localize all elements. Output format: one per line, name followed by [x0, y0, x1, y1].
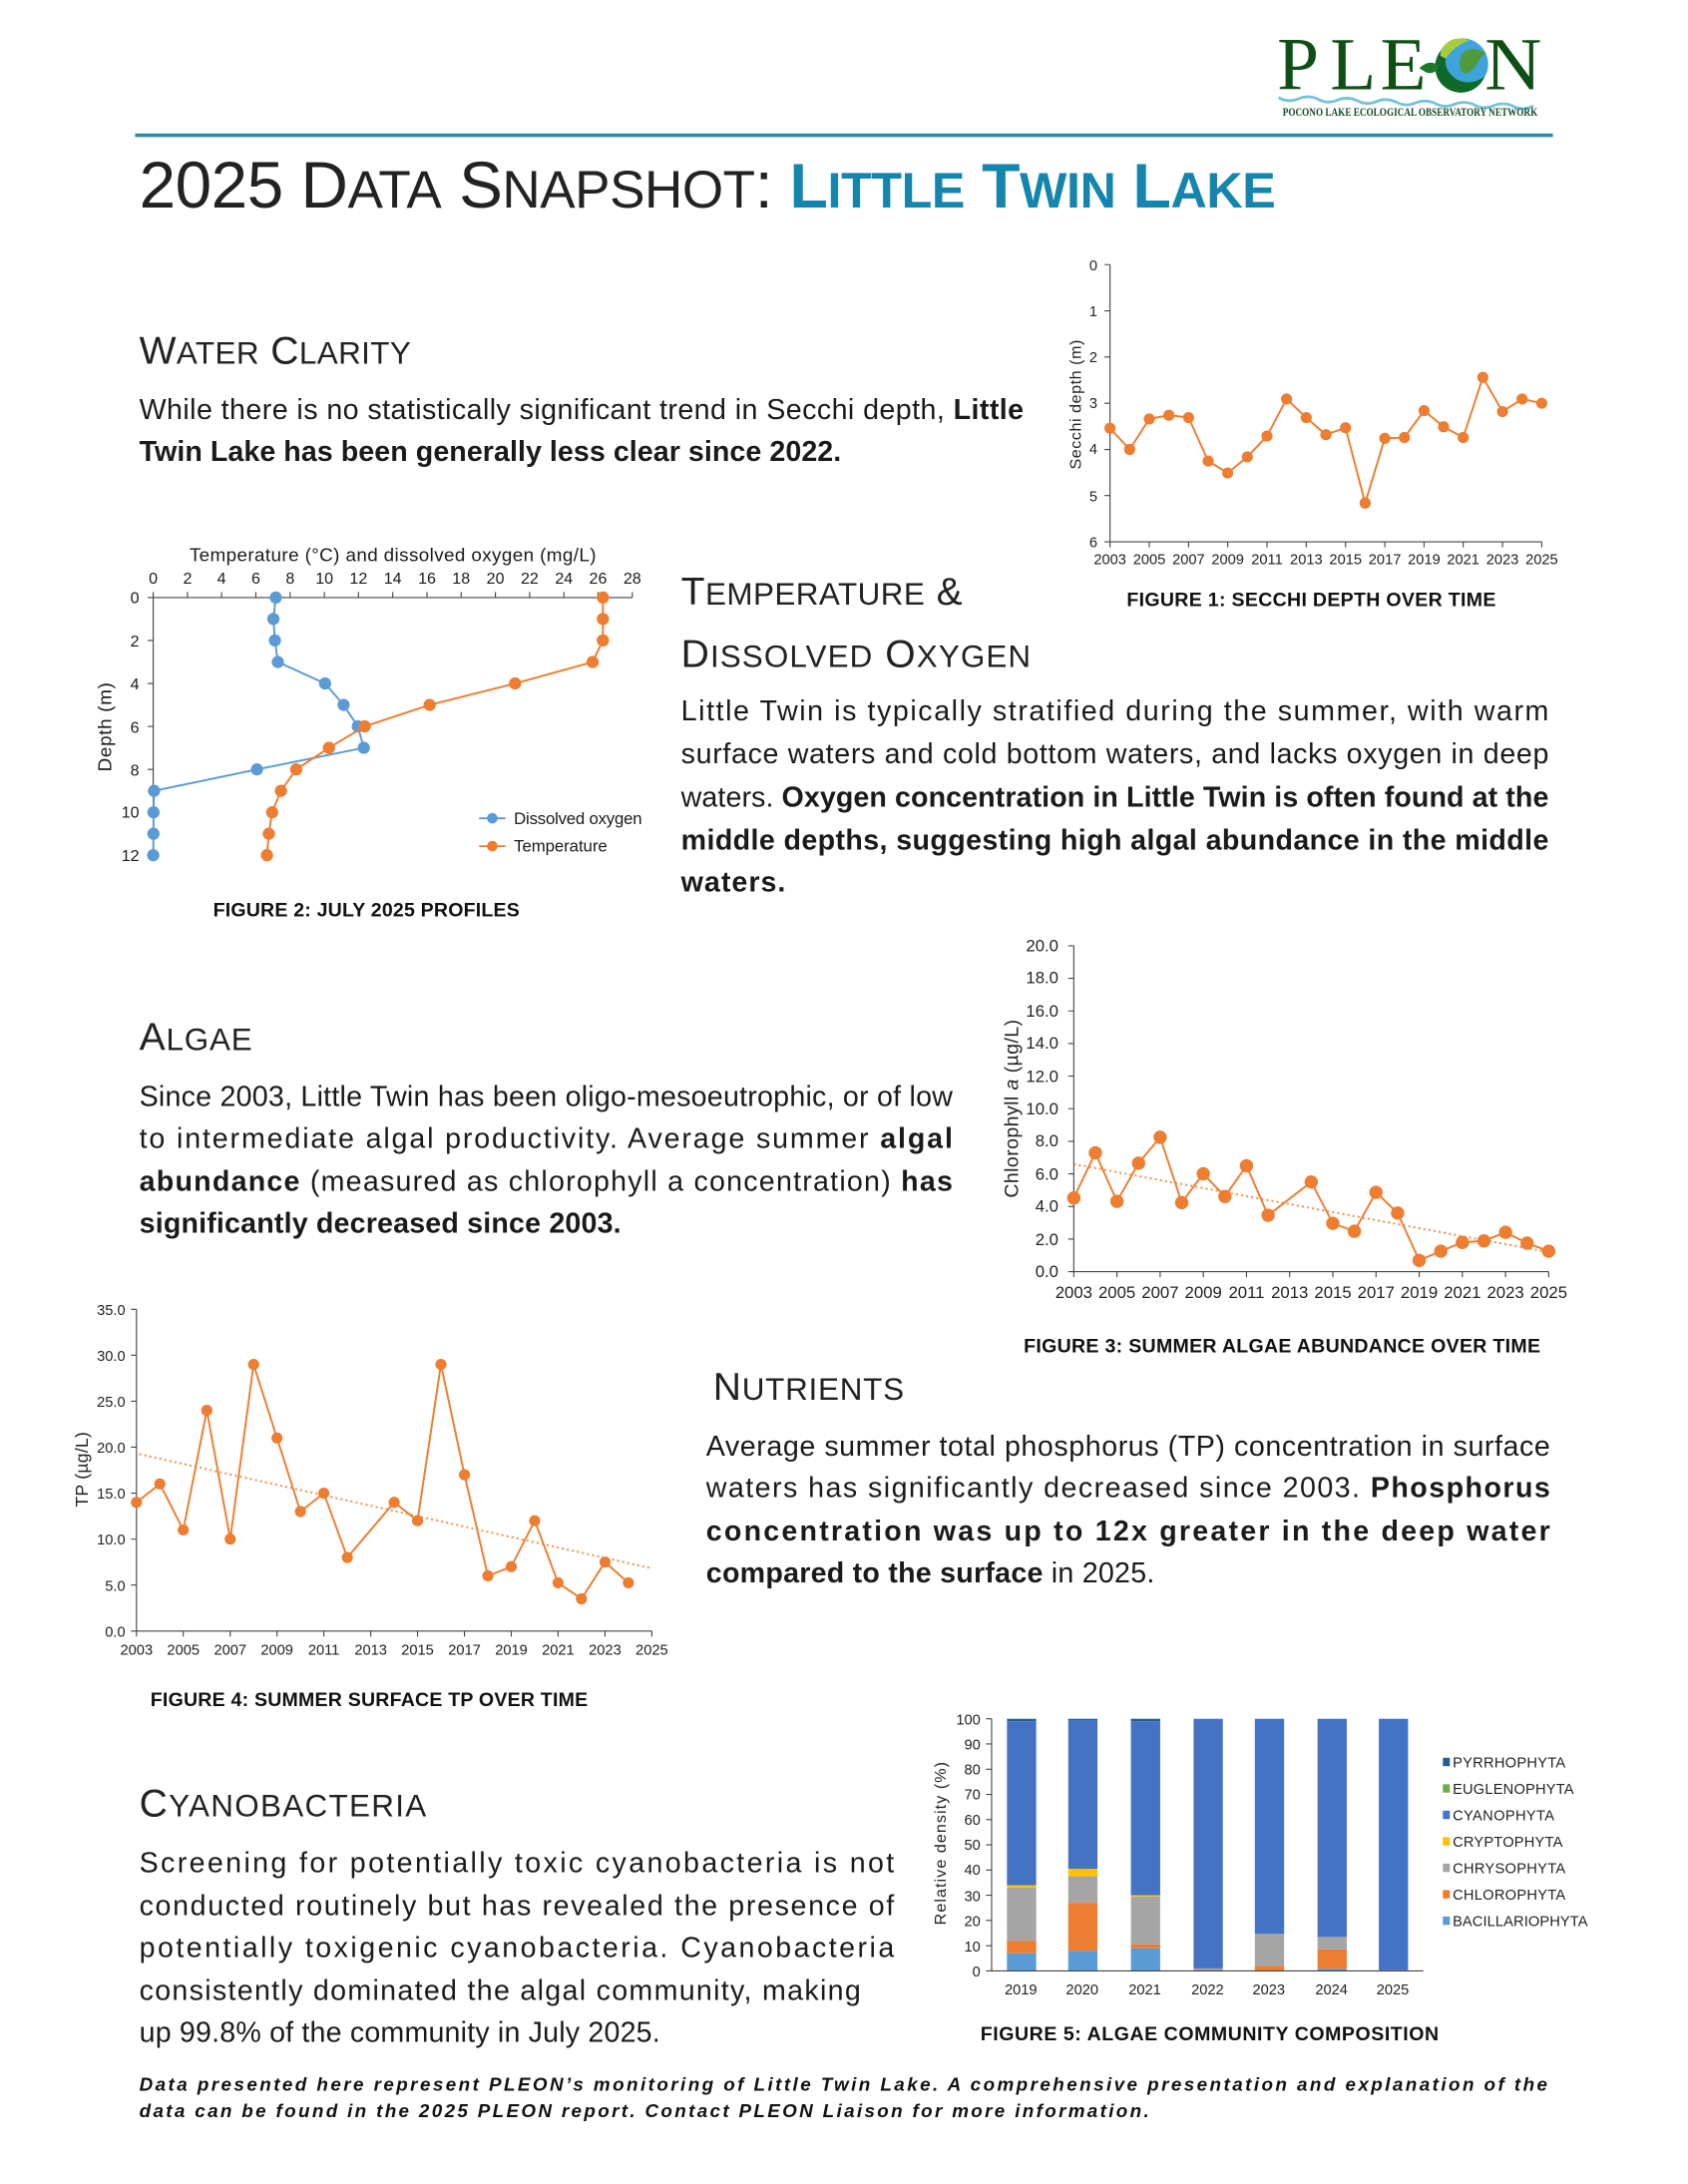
- axis labels: 0: [973, 1965, 981, 1980]
- axis labels: 10.0: [1026, 1099, 1058, 1118]
- axis labels: 4: [217, 570, 226, 588]
- axis labels: 2017: [448, 1642, 481, 1658]
- axis labels: 2011: [1228, 1283, 1264, 1302]
- heading: algae: ALGAE: [140, 1017, 252, 1060]
- section: temperature and dissolved oxygen: [680, 571, 1548, 898]
- text block: algae: abundance (measured as chlorophyll a concentration) has: [140, 1166, 953, 1198]
- text block: algae: to intermediate algal productivity. Average summer algal: [140, 1122, 953, 1154]
- logo letters: N: [1484, 23, 1541, 106]
- axis labels: 24: [555, 570, 573, 588]
- axis labels: 6: [251, 570, 260, 588]
- axis labels: 2003: [1055, 1283, 1092, 1302]
- chart: figure 5 algae community stacked bars: [932, 1712, 1588, 1998]
- axis labels: 2.0: [1036, 1230, 1058, 1249]
- axis labels: 0.0: [1036, 1262, 1058, 1281]
- axis labels: 2013: [354, 1642, 387, 1658]
- axis labels: 6: [1089, 536, 1097, 552]
- axis labels: 30: [965, 1890, 981, 1906]
- bar 2023: [1255, 1719, 1284, 1970]
- axis labels: 35.0: [97, 1303, 126, 1319]
- axis labels: 0: [149, 570, 158, 588]
- text block: nutrients: concentration was up to 12x greater in the deep water: [706, 1516, 1550, 1547]
- heading: temperature & dissolved oxygen: TEMPERATURE &: [681, 571, 963, 614]
- axis labels: 5: [1089, 490, 1097, 506]
- axis labels: 2025: [1525, 552, 1558, 568]
- axis labels: 2024: [1315, 1982, 1348, 1998]
- axis labels: 20.0: [97, 1441, 126, 1457]
- axis labels: 0: [131, 589, 140, 607]
- bar 2022: [1193, 1719, 1223, 1970]
- caption: figure 4: FIGURE 4: SUMMER SURFACE TP OVER TIME: [151, 1689, 588, 1711]
- axis labels: 2017: [1358, 1283, 1395, 1302]
- axis labels: Chlorophyll a (µg/L): [1002, 1020, 1024, 1198]
- legend: Temperature: [514, 837, 608, 856]
- text block: algae: Since 2003, Little Twin has been oligo-mesoeutrophic, or of low: [140, 1081, 953, 1112]
- text block: water clarity: [140, 394, 1024, 468]
- axis labels: TP (µg/L): [72, 1432, 92, 1508]
- logo letters: L: [1330, 23, 1376, 106]
- axis labels: 2011: [1251, 552, 1283, 568]
- trendline: [1073, 1164, 1548, 1252]
- axis labels: 2003: [121, 1642, 153, 1658]
- axis labels: 2007: [1172, 552, 1205, 568]
- text block: temperature and oxygen: middle depths, suggesting high algal abundance in the middle: [681, 825, 1548, 857]
- logo letters: [1277, 23, 1541, 106]
- axis labels: 20: [965, 1915, 981, 1931]
- axis labels: Secchi depth (m): [1066, 340, 1084, 469]
- axis labels: 20: [487, 570, 505, 588]
- axis labels: 4: [131, 675, 140, 693]
- legend: CHLOROPHYTA: [1453, 1888, 1565, 1904]
- axis labels: 2009: [1211, 552, 1244, 568]
- heading: water clarity: WATER CLARITY: [140, 329, 411, 372]
- axis labels: [1002, 936, 1567, 1302]
- icon: globe with fish and leaf: [1420, 38, 1488, 93]
- heading: nutrients: NUTRIENTS: [713, 1366, 904, 1409]
- section: algae: [140, 1017, 953, 1239]
- axis labels: 80: [965, 1763, 981, 1779]
- axis labels: 3: [1089, 396, 1097, 412]
- dissolved oxygen line: [154, 598, 364, 855]
- axis labels: 6: [131, 718, 140, 736]
- text block: cyanobacteria: conducted routinely but has revealed the presence of: [140, 1891, 894, 1923]
- axis labels: 2009: [1185, 1283, 1222, 1302]
- bar 2024: [1318, 1719, 1347, 1970]
- axis labels: Relative density (%): [932, 1762, 950, 1925]
- axis labels: 2025: [1530, 1283, 1567, 1302]
- axis labels: 2019: [1401, 1283, 1438, 1302]
- chart: figure 3 chlorophyll: [1002, 936, 1567, 1302]
- axis labels: 2025: [1377, 1982, 1409, 1998]
- axis labels: 8: [285, 570, 294, 588]
- heading: temperature & dissolved oxygen: DISSOLVED OXYGEN: [681, 634, 1031, 676]
- axis labels: 2021: [542, 1642, 575, 1658]
- legend: PYRRHOPHYTA: [1453, 1756, 1565, 1772]
- chart: figure 1 Secchi depth: [1066, 258, 1558, 568]
- axis labels: 2021: [1444, 1283, 1480, 1302]
- axis labels: 28: [624, 570, 641, 588]
- axis labels: 2005: [1098, 1283, 1135, 1302]
- axis labels: 8: [131, 762, 140, 780]
- section: water clarity: [140, 329, 1024, 468]
- trendline: [140, 1454, 651, 1568]
- axis labels: [932, 1712, 1409, 1998]
- title: LITTLE TWIN LAKE: [790, 152, 1276, 221]
- axis labels: 26: [590, 570, 607, 588]
- legend: Dissolved oxygen: [514, 809, 642, 828]
- logo letters: E: [1380, 23, 1427, 106]
- logo letters: P: [1277, 23, 1319, 106]
- axis labels: 2003: [1093, 552, 1126, 568]
- axis labels: 2019: [1005, 1982, 1038, 1998]
- axis labels: 5.0: [105, 1578, 126, 1594]
- text block: temperature and oxygen: Little Twin is typically stratified during the summer, with warm: [681, 695, 1548, 727]
- chart: figure 4 total phosphorus: [72, 1303, 668, 1658]
- axis labels: 12: [122, 847, 140, 865]
- text block: nutrients: Average summer total phosphorus (TP) concentration in surface: [706, 1431, 1550, 1463]
- axis labels: 4: [1089, 442, 1097, 458]
- axis labels: 2021: [1447, 552, 1479, 568]
- legend: CRYPTOPHYTA: [1453, 1835, 1563, 1851]
- axis labels: [72, 1303, 668, 1658]
- title: 2025 DATA SNAPSHOT:: [140, 149, 773, 221]
- text block: algae: [140, 1081, 953, 1239]
- axis labels: 2022: [1191, 1982, 1224, 1998]
- axis labels: 2023: [1253, 1982, 1285, 1998]
- axis labels: 0.0: [105, 1624, 126, 1640]
- chart: figure 2 July profiles: [95, 545, 642, 865]
- axis labels: 0: [1089, 258, 1097, 274]
- text block: nutrients: compared to the surface in 2025.: [706, 1557, 1154, 1589]
- axis labels: 4.0: [1036, 1197, 1058, 1216]
- axis labels: 2023: [1486, 552, 1518, 568]
- axis labels: 6.0: [1036, 1164, 1058, 1183]
- text block: cyanobacteria: up 99.8% of the community in July 2025.: [140, 2017, 660, 2049]
- axis labels: 2: [131, 633, 140, 651]
- caption: figure 2: FIGURE 2: JULY 2025 PROFILES: [213, 900, 520, 922]
- heading: temperature & dissolved oxygen: [681, 571, 1031, 676]
- legend: [479, 809, 642, 856]
- axis labels: 2019: [495, 1642, 528, 1658]
- axis labels: 2023: [589, 1642, 622, 1658]
- axis labels: 2007: [213, 1642, 246, 1658]
- axis labels: 22: [521, 570, 539, 588]
- axis labels: 14: [384, 570, 402, 588]
- text block: temperature and oxygen: [680, 695, 1548, 898]
- legend: BACILLARIOPHYTA: [1453, 1915, 1588, 1931]
- axis labels: 10.0: [97, 1532, 126, 1548]
- legend: CHRYSOPHYTA: [1453, 1862, 1565, 1878]
- axis labels: 2013: [1290, 552, 1323, 568]
- axis labels: 2: [183, 570, 192, 588]
- axis labels: 2005: [167, 1642, 200, 1658]
- text block: temperature and oxygen: surface waters and cold bottom waters, and lacks oxygen in deep: [681, 738, 1548, 770]
- text block: water clarity: Twin Lake has been generally less clear since 2022.: [140, 436, 841, 468]
- caption: figure 1: FIGURE 1: SECCHI DEPTH OVER TIME: [1126, 589, 1495, 611]
- axis labels: Depth (m): [95, 682, 116, 771]
- logo tagline: POCONO LAKE ECOLOGICAL OBSERVATORY NETWORK: [1283, 107, 1537, 119]
- axis labels: 2015: [1314, 1283, 1352, 1302]
- axis labels: 2017: [1369, 552, 1401, 568]
- axis labels: 60: [965, 1813, 981, 1829]
- axis labels: 20.0: [1026, 936, 1058, 955]
- axis labels: 2009: [260, 1642, 293, 1658]
- text block: cyanobacteria: consistently dominated the algal community, making: [140, 1975, 861, 2007]
- section: cyanobacteria: [140, 1782, 894, 2049]
- axis labels: 2007: [1141, 1283, 1179, 1302]
- axis labels: 2020: [1065, 1982, 1098, 1998]
- bar 2025: [1379, 1719, 1408, 1970]
- axis labels: 2015: [1329, 552, 1362, 568]
- footer note: data can be found in the 2025 PLEON report. Contact PLEON Liaison for more information.: [140, 2100, 1149, 2121]
- legend: CYANOPHYTA: [1453, 1809, 1554, 1825]
- axis labels: 30.0: [97, 1349, 126, 1365]
- text block: cyanobacteria: [140, 1847, 894, 2049]
- axis labels: 15.0: [97, 1487, 126, 1503]
- legend: EUGLENOPHYTA: [1453, 1782, 1574, 1798]
- axis labels: 2025: [635, 1642, 668, 1658]
- text block: temperature and oxygen: waters. Oxygen concentration in Little Twin is often found at the: [680, 781, 1548, 813]
- bars: [1007, 1719, 1408, 1970]
- axis labels: 10: [965, 1940, 981, 1956]
- axis labels: 8.0: [1036, 1131, 1058, 1150]
- axis labels: 16: [418, 570, 436, 588]
- text block: temperature and oxygen: waters.: [680, 866, 785, 898]
- axis labels: 2005: [1133, 552, 1165, 568]
- axis labels: 50: [965, 1838, 981, 1854]
- text block: cyanobacteria: Screening for potentially toxic cyanobacteria is not: [140, 1847, 894, 1879]
- title: [140, 149, 1276, 221]
- heading: cyanobacteria: CYANOBACTERIA: [140, 1782, 426, 1825]
- logo waves: [1279, 97, 1533, 109]
- text block: nutrients: waters has significantly decreased since 2003. Phosphorus: [705, 1473, 1550, 1505]
- axis labels: 12: [349, 570, 367, 588]
- axis labels: Temperature (°C) and dissolved oxygen (mg/L): [190, 545, 597, 566]
- bar 2019: [1007, 1719, 1037, 1970]
- axis labels: 12.0: [1026, 1068, 1058, 1087]
- axis labels: 1: [1089, 304, 1097, 320]
- text block: nutrients: [705, 1431, 1550, 1589]
- axis labels: 2015: [401, 1642, 434, 1658]
- axis labels: 18.0: [1026, 969, 1058, 988]
- axis labels: 2021: [1128, 1982, 1161, 1998]
- bar 2020: [1068, 1719, 1097, 1970]
- bar 2021: [1131, 1719, 1160, 1970]
- axis labels: 16.0: [1026, 1002, 1058, 1021]
- axis labels: 2013: [1271, 1283, 1308, 1302]
- section: nutrients: [705, 1366, 1550, 1589]
- axis labels: 25.0: [97, 1395, 126, 1411]
- axis labels: [1066, 258, 1558, 568]
- text block: water clarity: While there is no statistically significant trend in Secchi depth, Little: [140, 394, 1024, 426]
- axis labels: 40: [965, 1863, 981, 1879]
- axis labels: 10: [315, 570, 333, 588]
- axis labels: 70: [965, 1788, 981, 1804]
- axis labels: 14.0: [1026, 1034, 1058, 1053]
- caption: figure 3: FIGURE 3: SUMMER ALGAE ABUNDANCE OVER TIME: [1024, 1336, 1540, 1358]
- axis labels: 2011: [308, 1642, 339, 1658]
- axis labels: 2023: [1486, 1283, 1524, 1302]
- footer note: Data presented here represent PLEON’s monitoring of Little Twin Lake. A comprehensive presentation and explanation of the: [140, 2073, 1547, 2094]
- axis labels: [95, 545, 641, 865]
- axis labels: 90: [965, 1737, 981, 1753]
- axis labels: 18: [452, 570, 470, 588]
- text block: cyanobacteria: potentially toxigenic cyanobacteria. Cyanobacteria: [140, 1932, 894, 1964]
- axis labels: 2: [1089, 350, 1097, 366]
- legend: [1443, 1756, 1588, 1931]
- caption: figure 5: FIGURE 5: ALGAE COMMUNITY COMPOSITION: [981, 2023, 1439, 2045]
- text block: algae: significantly decreased since 2003.: [140, 1207, 622, 1239]
- axis labels: 10: [122, 803, 140, 821]
- axis labels: 100: [956, 1712, 981, 1728]
- axis labels: 2019: [1408, 552, 1441, 568]
- footer note: [140, 2073, 1547, 2121]
- logo: PLEON: [1277, 23, 1541, 119]
- temperature line: [267, 598, 603, 855]
